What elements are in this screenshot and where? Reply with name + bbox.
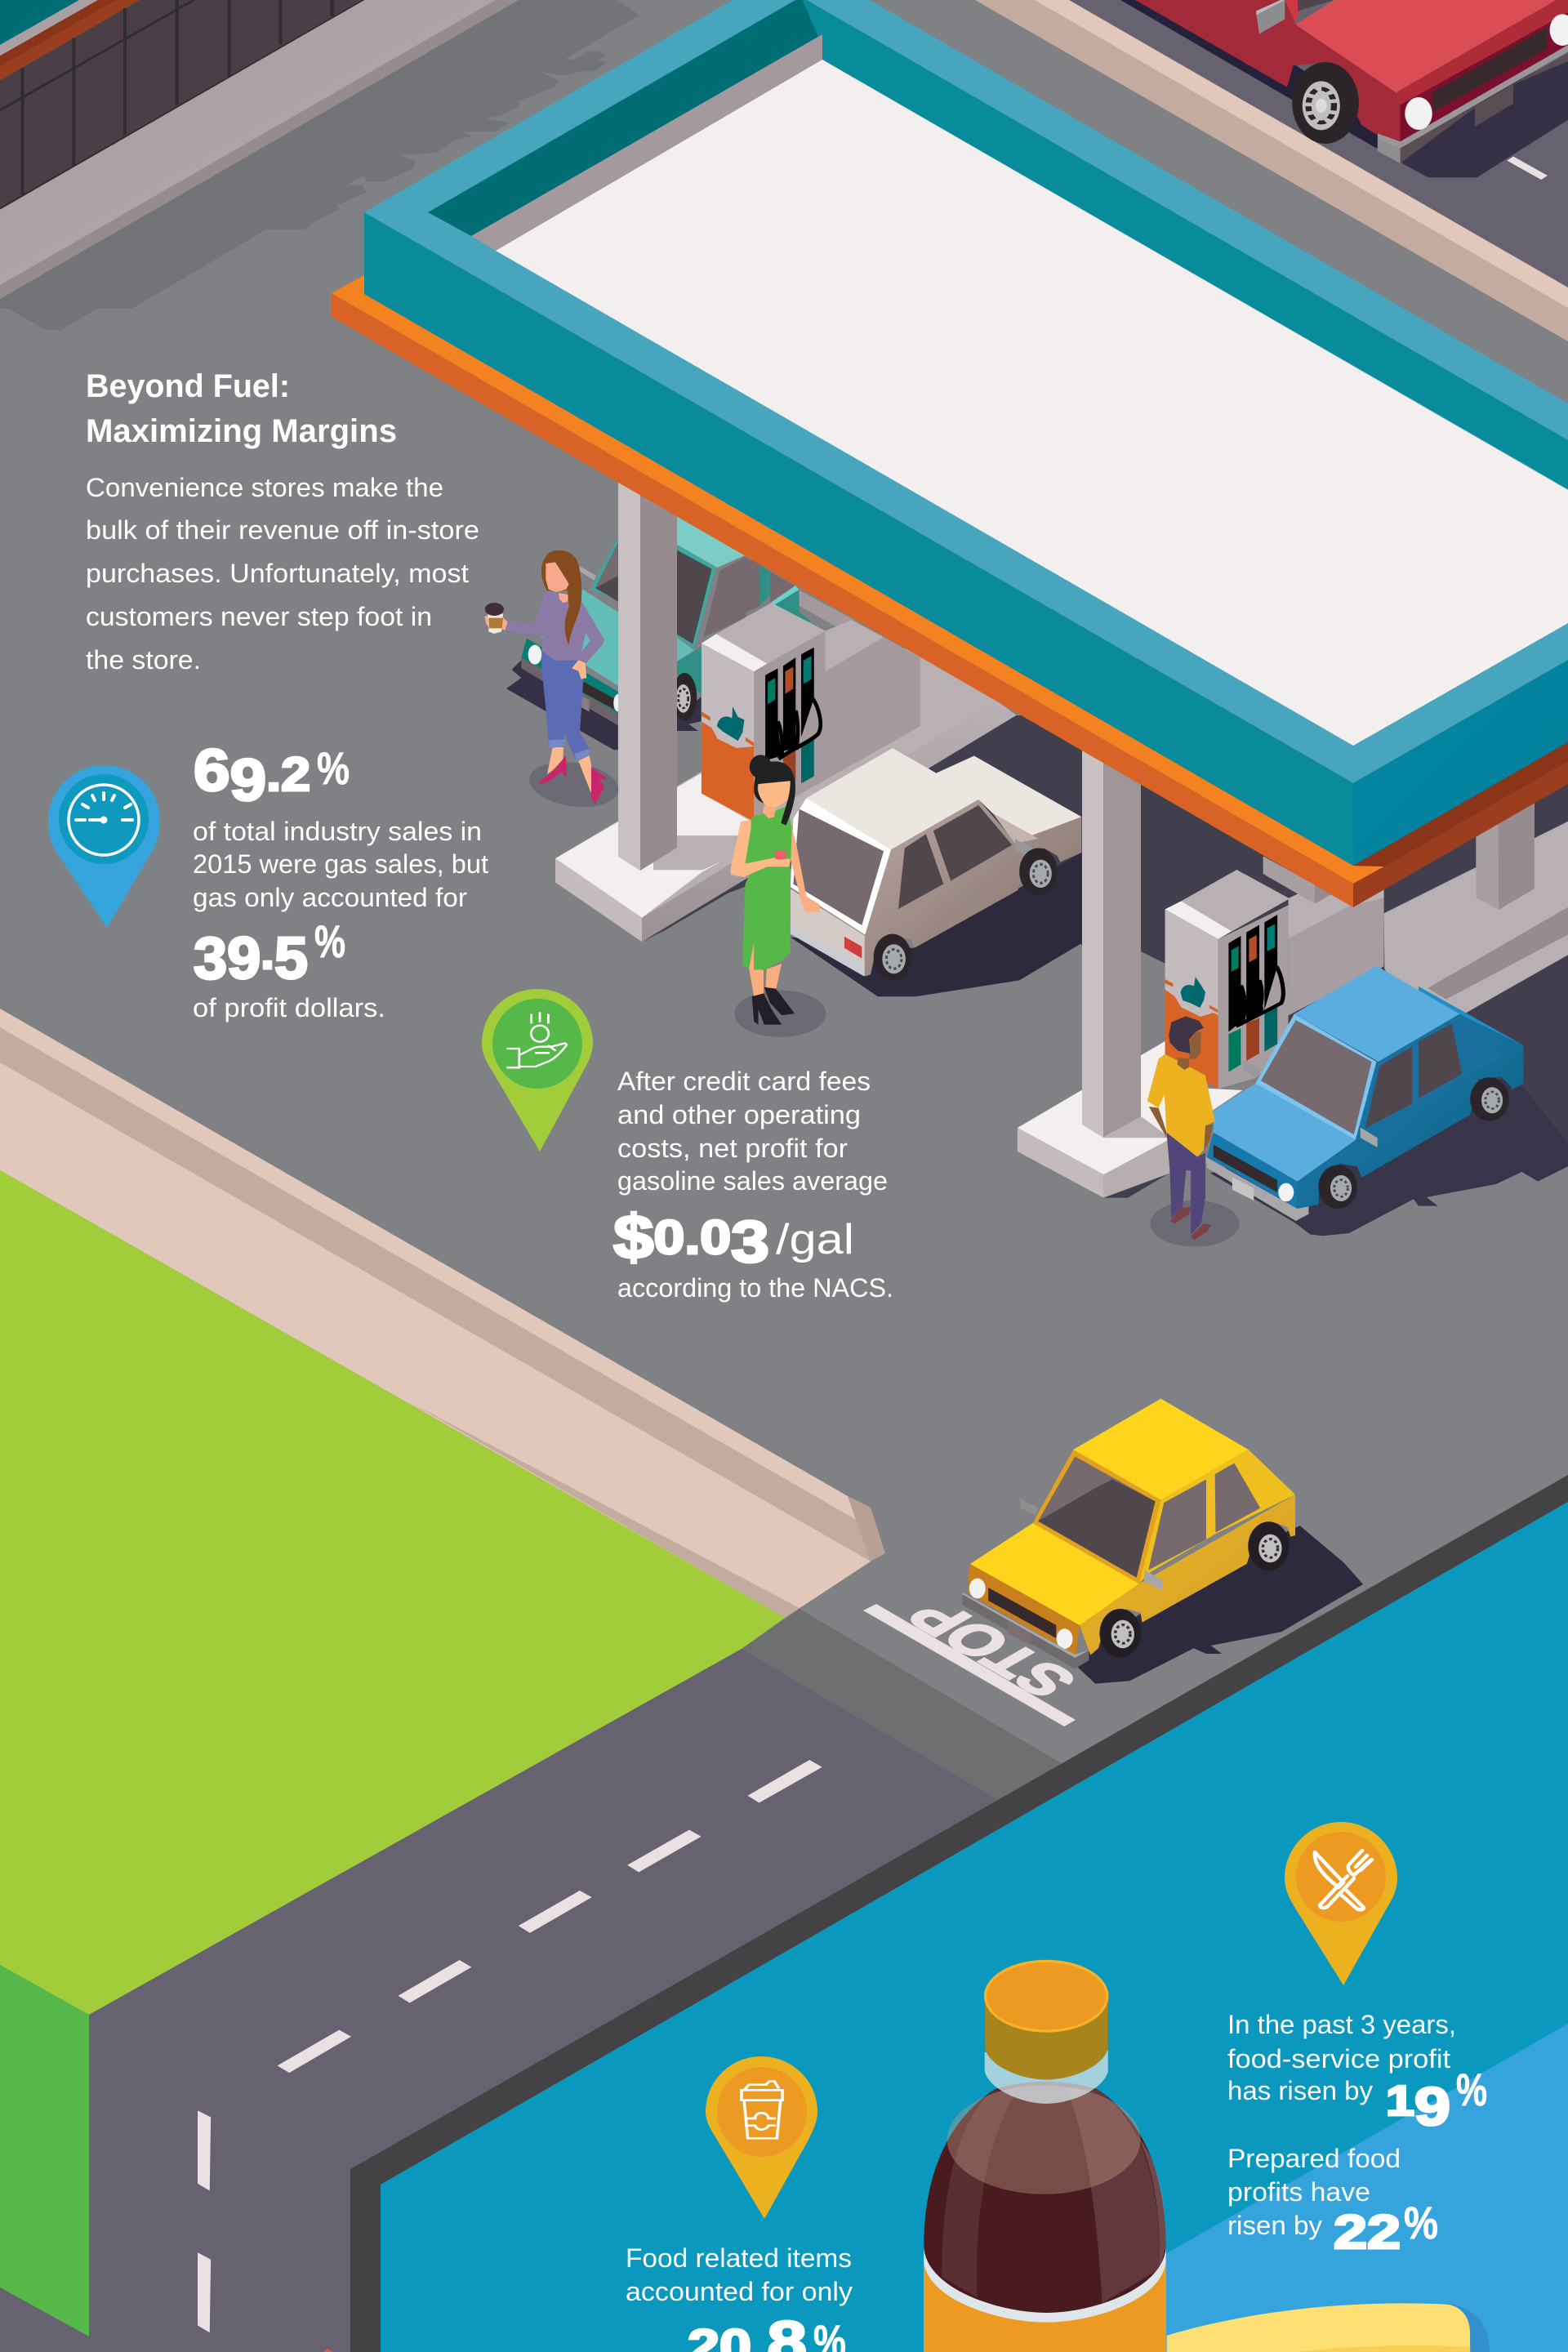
stop line bbox=[863, 1604, 1076, 1726]
woman in green dress bbox=[731, 755, 826, 1037]
stat: gas sales share: . bbox=[261, 926, 274, 979]
building and sidewalk top left bbox=[0, 0, 639, 330]
heading bbox=[86, 368, 397, 449]
yellow box bbox=[1167, 2303, 1490, 2352]
stat: food service profit: % bbox=[1456, 2064, 1487, 2115]
stat: food service profit: risen by bbox=[1227, 2211, 1322, 2240]
stat: gas sales share bbox=[193, 738, 488, 1022]
stat: net profit per gallon: 0.0 bbox=[654, 1211, 731, 1264]
left pump bbox=[702, 590, 920, 823]
stat: food service profit: food-service profit bbox=[1227, 2044, 1450, 2074]
stat: food service profit: 22 bbox=[1334, 2206, 1401, 2259]
teal car bbox=[506, 506, 811, 750]
icon: food service pin bbox=[1285, 1822, 1397, 1985]
left pillar bbox=[618, 408, 677, 871]
road bbox=[0, 1475, 1568, 2352]
stat: net profit per gallon: /gal bbox=[776, 1216, 854, 1263]
blue car bbox=[1205, 966, 1568, 1236]
blue lower panel bbox=[381, 1502, 1568, 2352]
yellow car bbox=[962, 1399, 1363, 1684]
stop road marking: STOP bbox=[893, 1592, 1091, 1706]
stat: gas sales share: .2 bbox=[266, 748, 310, 801]
stat: gas sales share: of total industry sales in bbox=[193, 817, 482, 846]
stat: food service profit: Prepared food bbox=[1227, 2144, 1401, 2173]
intro paragraph: purchases. Unfortunately, most bbox=[86, 559, 469, 588]
stat: gas sales share: 39 bbox=[194, 926, 261, 991]
intro paragraph: the store. bbox=[86, 645, 201, 675]
stat: gas sales share: 5 bbox=[274, 926, 308, 991]
white car bbox=[791, 748, 1081, 996]
left curb bbox=[0, 1009, 885, 1618]
man and blue car bbox=[1147, 966, 1568, 1247]
icon: rabbit logo bbox=[1181, 977, 1205, 1008]
stat: gas sales share: % bbox=[317, 742, 350, 794]
heading: Maximizing Margins bbox=[86, 413, 397, 449]
canopy bbox=[332, 0, 1568, 907]
bottle bbox=[924, 1961, 1166, 2352]
panel text: beyond fuel bbox=[86, 368, 479, 675]
stat: food service profit: In the past 3 years, bbox=[1227, 2010, 1456, 2039]
stat: food service profit: has risen by bbox=[1227, 2076, 1373, 2105]
stat: food service profit: profits have bbox=[1227, 2177, 1370, 2207]
intro paragraph: bulk of their revenue off in-store bbox=[86, 515, 479, 545]
right pillar bbox=[1082, 719, 1141, 1138]
intro paragraph bbox=[86, 473, 479, 675]
man in yellow shirt bbox=[1147, 1016, 1239, 1247]
woman with coffee bbox=[484, 550, 621, 813]
stat: net profit per gallon: 3 bbox=[731, 1209, 769, 1275]
red car bbox=[1120, 0, 1568, 180]
grass bbox=[0, 1170, 785, 2336]
icon: coffee cup pin bbox=[706, 2056, 817, 2219]
icon: blue gauge pin bbox=[48, 765, 160, 928]
intro paragraph: customers never step foot in bbox=[86, 602, 432, 631]
stat: gas sales share: % bbox=[314, 915, 345, 967]
stat: gas sales share: gas only accounted for bbox=[193, 883, 467, 912]
icon: green coin hand pin bbox=[482, 989, 593, 1152]
right pump island bbox=[1018, 819, 1568, 1198]
stat: gas sales share: 6 bbox=[194, 738, 230, 804]
back pillar and box under canopy bbox=[1263, 803, 1535, 910]
heading: Beyond Fuel: bbox=[86, 368, 290, 404]
stat: food service profit: 1 bbox=[1386, 2078, 1414, 2125]
stat: net profit per gallon bbox=[613, 1067, 893, 1303]
stat: net profit per gallon: gasoline sales average bbox=[617, 1166, 888, 1196]
left pump island slab bbox=[555, 625, 1017, 942]
stat: net profit per gallon: costs, net profit for bbox=[617, 1134, 848, 1163]
shadow under canopy bbox=[926, 715, 1568, 1176]
stat: gas sales share: 9 bbox=[230, 748, 266, 813]
stat: net profit per gallon: $ bbox=[613, 1203, 654, 1272]
stat: net profit per gallon: according to the NACS. bbox=[617, 1273, 893, 1303]
stat: gas sales share: 2015 were gas sales, but bbox=[193, 849, 488, 879]
icon: rabbit logo bbox=[717, 706, 744, 741]
stat: food related items: Food related items bbox=[626, 2243, 852, 2273]
stat: net profit per gallon: After credit card fees bbox=[617, 1067, 871, 1096]
stat: gas sales share: of profit dollars. bbox=[193, 993, 385, 1022]
stat: food related items: accounted for only bbox=[626, 2277, 853, 2306]
stat: net profit per gallon: and other operating bbox=[617, 1100, 861, 1129]
intro paragraph: Convenience stores make the bbox=[86, 473, 443, 502]
stat: food service profit: 9 bbox=[1414, 2076, 1450, 2136]
curb top right bbox=[975, 0, 1568, 341]
stat: food service profit: % bbox=[1404, 2197, 1438, 2248]
stat: food service profit bbox=[1227, 2010, 1487, 2259]
stat: food related items bbox=[626, 2243, 853, 2352]
